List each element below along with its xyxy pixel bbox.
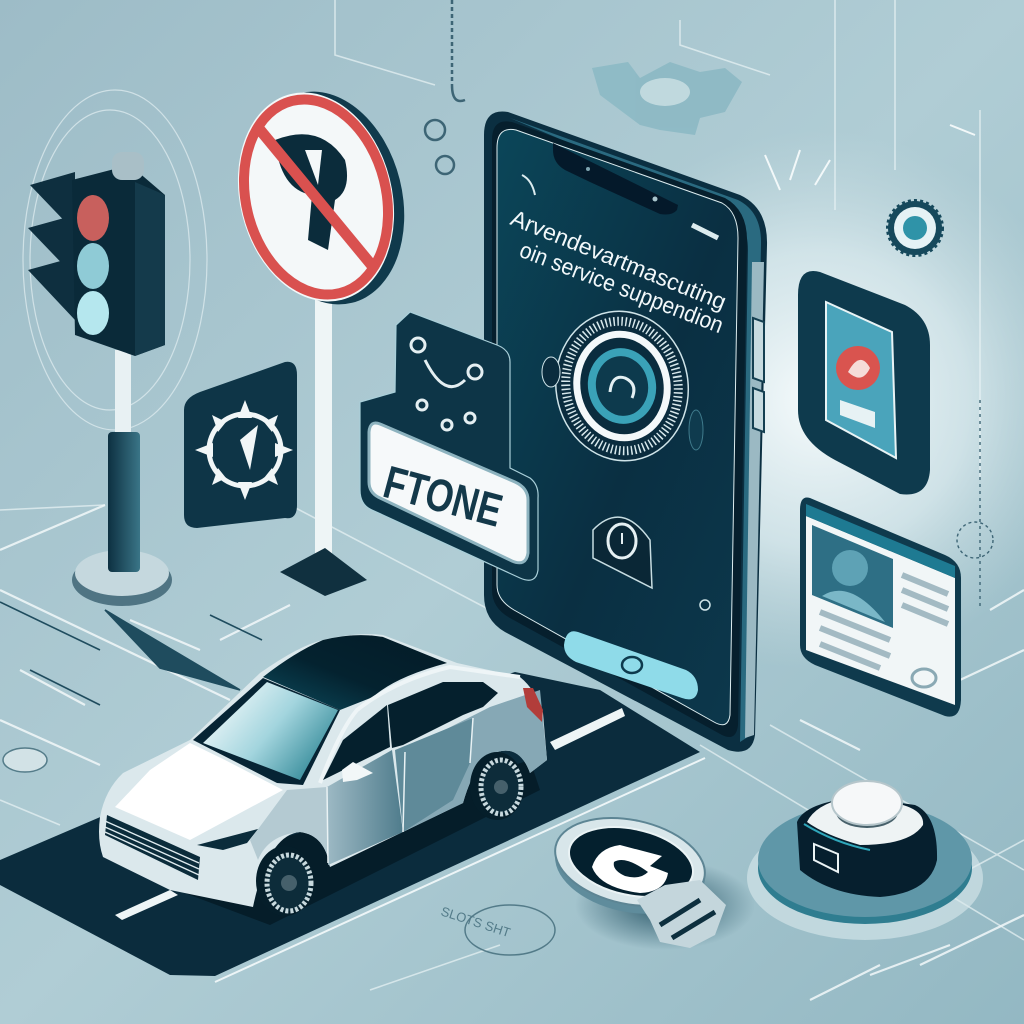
stamp text: SLOTS SHT [439, 904, 512, 940]
decorative sparks [765, 125, 975, 190]
slash [256, 125, 374, 268]
front door [327, 750, 403, 865]
push button [747, 781, 983, 940]
roof rail [320, 667, 520, 783]
headline: Arvendevartmascuting [507, 205, 730, 315]
pole [115, 350, 131, 435]
sign ring [217, 76, 415, 318]
rear wheel [470, 752, 524, 820]
cap [112, 152, 144, 180]
traffic light [28, 152, 172, 606]
cyan lights [77, 243, 109, 289]
notch [553, 143, 678, 214]
visors [28, 172, 75, 320]
lower side panel [250, 787, 330, 867]
side phone [798, 271, 930, 494]
windshield [203, 682, 338, 780]
stamp text [3, 748, 555, 955]
car [99, 634, 547, 925]
profile card [800, 498, 961, 717]
screen [497, 129, 738, 725]
rear door [395, 718, 473, 832]
hood [115, 743, 283, 840]
shadow [150, 760, 540, 925]
phone shell [484, 111, 767, 752]
base [72, 554, 172, 606]
icon: small gear badge [888, 201, 942, 255]
road [0, 672, 705, 982]
dotted ring ornament [957, 400, 993, 610]
gear badge sign [184, 362, 297, 528]
side windows [323, 705, 390, 780]
tail light [523, 688, 543, 722]
housing [72, 165, 165, 356]
mirror [342, 762, 373, 782]
hook chain [425, 0, 465, 174]
glyph [275, 134, 347, 250]
sign back [226, 75, 426, 321]
dial [542, 301, 703, 471]
door lines [327, 718, 473, 863]
prohibition sign [217, 75, 426, 596]
status icons [522, 175, 535, 195]
headline: oin service suppendion [516, 236, 727, 338]
phone [484, 111, 767, 752]
front wheel [256, 846, 314, 916]
ring badge [547, 805, 726, 948]
headlight [197, 829, 258, 850]
windshield frame [193, 678, 340, 785]
pole [315, 295, 332, 560]
timer icon [593, 517, 652, 588]
FTONE sign: FTONE [378, 455, 508, 537]
red light [77, 195, 109, 241]
roof [263, 635, 447, 710]
icon: faint gear top right [592, 62, 742, 135]
body [99, 634, 547, 907]
pay button [564, 631, 698, 699]
screen bezel [492, 121, 747, 737]
sign glyphs [411, 338, 482, 430]
label [369, 423, 528, 563]
grille [105, 815, 200, 880]
FTONE sign [360, 312, 538, 580]
shadow behind ring badge [575, 860, 755, 950]
arcs around traffic light [23, 90, 207, 430]
